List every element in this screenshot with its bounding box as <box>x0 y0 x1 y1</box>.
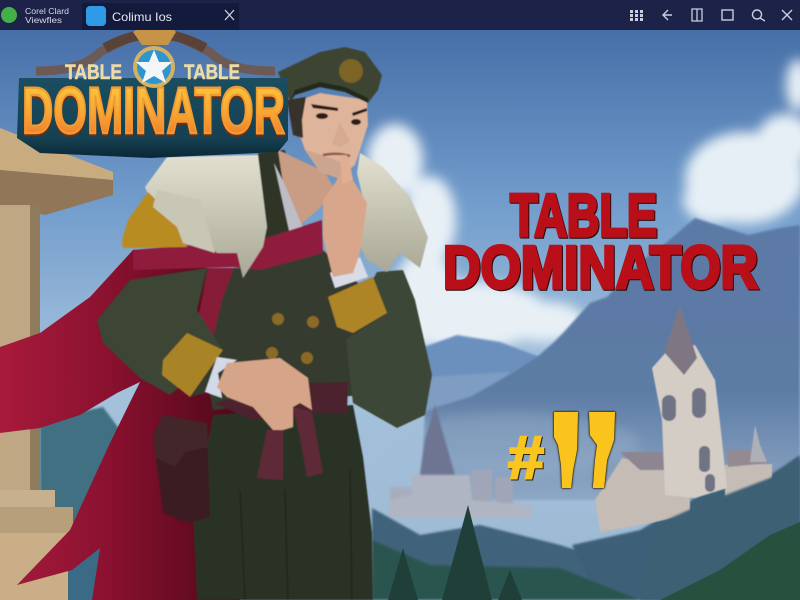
medallion blue <box>137 50 171 84</box>
left fur collar <box>145 155 267 278</box>
large mountain <box>420 218 800 500</box>
satchel <box>153 415 210 523</box>
tab close icon <box>225 10 234 20</box>
crown <box>133 19 176 45</box>
bar background <box>0 0 800 30</box>
wrist cuff <box>330 257 368 288</box>
logo right TABLE: TABLE <box>184 61 240 84</box>
satchel flap <box>153 415 208 467</box>
tower <box>652 345 727 498</box>
dark collar <box>258 150 296 245</box>
resting hand <box>217 358 312 430</box>
castle wall <box>388 475 532 518</box>
nave wall <box>595 458 690 532</box>
figure <box>97 47 432 600</box>
hair <box>287 97 306 138</box>
logo left arch <box>36 35 135 71</box>
shaft shadow <box>30 205 40 490</box>
left gold cuff <box>162 333 223 397</box>
window top bar <box>0 0 800 30</box>
clouds: behind figure <box>367 124 585 349</box>
grid icon <box>630 10 643 21</box>
right roof <box>727 450 770 467</box>
white cuff <box>205 357 237 398</box>
title DOMINATOR: DOMINATOR <box>443 234 758 301</box>
red scarf <box>133 220 323 270</box>
hash mark: # <box>508 424 544 491</box>
search icon <box>753 10 765 21</box>
tab title: Colimu Ios <box>112 10 172 24</box>
hat band <box>290 82 368 103</box>
capital top <box>0 128 113 180</box>
jacket buttons <box>266 313 319 364</box>
app logo icon <box>1 7 17 23</box>
castle right tower <box>472 470 492 506</box>
capital band <box>0 170 113 215</box>
forearm right <box>328 277 385 340</box>
logo <box>17 19 288 158</box>
nave roof <box>620 452 690 470</box>
eyes and brows <box>311 104 367 125</box>
logo right arch <box>175 35 275 71</box>
right gold cuff <box>328 277 387 333</box>
back arrow icon <box>663 10 672 20</box>
app subname: Viewfles <box>25 15 62 25</box>
medallion star <box>136 50 172 83</box>
castle left tower <box>390 487 414 517</box>
torso jacket <box>197 250 360 410</box>
fur lower feathers over epaulette <box>153 190 215 253</box>
left forearm <box>190 350 234 397</box>
title TABLE: TABLE <box>510 182 657 249</box>
distant castle <box>388 405 532 518</box>
right sleeve <box>345 270 432 428</box>
scarf strand <box>195 268 234 342</box>
right fur collar <box>357 153 428 272</box>
close icon <box>782 10 792 20</box>
valley mist <box>380 413 640 477</box>
distant mountains <box>410 335 540 415</box>
tab icon <box>86 6 106 26</box>
legs <box>193 405 373 600</box>
front hill over cathedral <box>640 460 800 600</box>
side pinnacle <box>750 425 767 462</box>
pine trees <box>388 505 522 600</box>
hat badge <box>339 59 363 83</box>
green hill left <box>40 407 120 600</box>
mouth <box>323 154 350 156</box>
logo star medallion <box>133 46 175 88</box>
lifted finger over lips <box>340 155 353 184</box>
logo DOMINATOR: DOMINATOR <box>22 73 285 147</box>
trouser crease <box>240 470 352 600</box>
hat <box>278 47 382 103</box>
stone pillar <box>0 128 113 600</box>
clouds: upper right <box>683 59 800 224</box>
forest bottom right <box>660 522 800 600</box>
tower windows <box>662 388 715 492</box>
face <box>298 93 368 178</box>
app name: Corel Clard <box>25 6 69 16</box>
logo panel <box>17 78 288 158</box>
jaw shadow <box>305 150 350 178</box>
low hill under cape <box>68 545 100 600</box>
logo left TABLE: TABLE <box>65 61 122 84</box>
base moulding <box>0 507 73 533</box>
number 11: 11 <box>548 389 626 521</box>
gold epaulette <box>122 192 187 248</box>
neck <box>278 150 335 225</box>
castle far tower <box>495 477 513 507</box>
white shirt <box>274 163 322 235</box>
active tab <box>82 3 239 30</box>
base flange <box>0 490 55 507</box>
castle keep with spire <box>420 405 455 475</box>
shaft <box>0 205 40 490</box>
cathedral <box>595 305 772 532</box>
crimson cape <box>0 250 240 600</box>
sash tie right <box>293 407 323 477</box>
sash <box>213 382 348 420</box>
background foreground hills <box>372 455 800 600</box>
split view icon <box>692 9 702 21</box>
spire <box>664 305 697 375</box>
nose <box>332 122 350 147</box>
maximize icon <box>722 10 733 20</box>
right wing wall <box>725 464 772 500</box>
plinth <box>0 533 68 600</box>
raised hand <box>323 157 367 277</box>
left sleeve <box>97 268 223 395</box>
sash tie left <box>257 430 283 480</box>
logo centre arch <box>105 34 205 48</box>
